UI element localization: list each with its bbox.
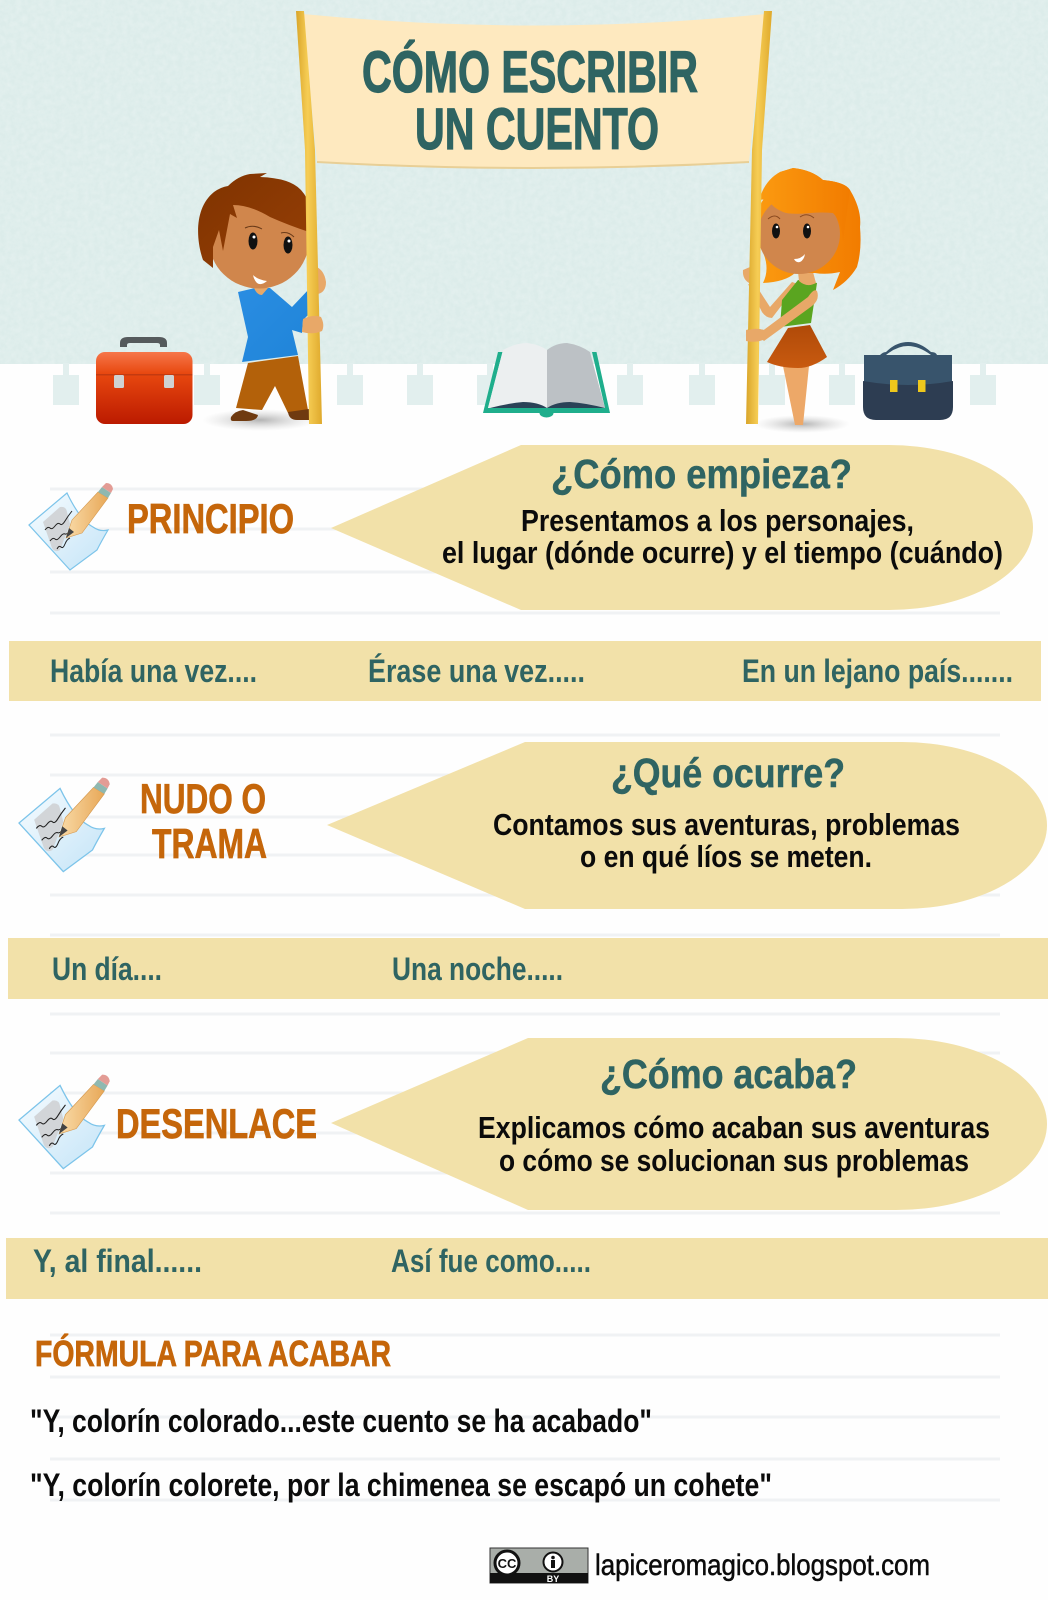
formula one: "Y, colorín colorado...este cuento se ha acabado" [30, 1403, 652, 1439]
strip: ending openers [6, 1238, 1048, 1299]
right banner pole [746, 11, 772, 424]
left banner pole [296, 11, 322, 424]
strip: story openers [9, 641, 1041, 701]
icon: open book [483, 343, 610, 418]
speech bubble [331, 1038, 1047, 1210]
icon: paper and pencil [19, 778, 110, 872]
heading: principio: PRINCIPIO [127, 495, 294, 542]
row of pale tabs along the horizon [53, 363, 996, 405]
strip: middle openers [8, 938, 1048, 999]
creative commons badge: CC [498, 1556, 517, 1571]
closing formulas [30, 1332, 772, 1503]
speech bubble: o en qué líos se meten. [580, 839, 872, 874]
panel: desenlace [19, 1038, 1047, 1210]
heading: nudo o trama: TRAMA [152, 820, 267, 867]
speech bubble [331, 445, 1033, 610]
speech bubble: o cómo se solucionan sus problemas [499, 1143, 969, 1178]
icon: toolbox [96, 337, 192, 424]
strip: middle openers: Un día.... [52, 951, 162, 987]
heading: nudo o trama: NUDO O [140, 775, 266, 822]
title: CÓMO ESCRIBIR [362, 40, 698, 105]
speech bubble: ¿Cómo empieza? [551, 451, 852, 497]
heading: desenlace: DESENLACE [116, 1100, 317, 1147]
notebook ruled lines [50, 489, 1000, 1500]
panel: nudo o trama [19, 742, 1047, 909]
strip: middle openers: Una noche..... [392, 951, 563, 987]
strip: story openers: Había una vez.... [50, 653, 257, 689]
creative commons badge [490, 1548, 588, 1584]
speech bubble [327, 742, 1047, 909]
strip: ending openers: Así fue como..... [391, 1243, 591, 1279]
sky background [0, 0, 1048, 364]
strip: ending openers: Y, al final...... [33, 1243, 202, 1279]
speech bubble: ¿Qué ocurre? [611, 750, 845, 796]
icon: paper and pencil [29, 483, 113, 570]
icon: satchel [863, 342, 953, 420]
formula two: "Y, colorín colorete, por la chimenea se escapó un cohete" [30, 1467, 772, 1503]
strip: story openers: Érase una vez..... [368, 653, 585, 689]
banner cloth [303, 14, 765, 168]
panel: principio [29, 445, 1033, 610]
creative commons badge: BY [547, 1574, 559, 1584]
speech bubble: ¿Cómo acaba? [600, 1051, 857, 1097]
blog url: lapiceromagico.blogspot.com [595, 1549, 930, 1582]
heading: formula: FÓRMULA PARA ACABAR [35, 1332, 391, 1374]
character: boy [198, 173, 326, 431]
title [362, 40, 698, 162]
heading: nudo o trama [140, 775, 267, 867]
icon: paper and pencil [19, 1075, 110, 1169]
speech bubble: Presentamos a los personajes, [521, 503, 914, 538]
girl's front hand [746, 329, 765, 342]
speech bubble: Contamos sus aventuras, problemas [493, 807, 960, 842]
character: girl [743, 168, 861, 433]
title: UN CUENTO [415, 97, 659, 162]
boy's front hand [302, 316, 323, 333]
